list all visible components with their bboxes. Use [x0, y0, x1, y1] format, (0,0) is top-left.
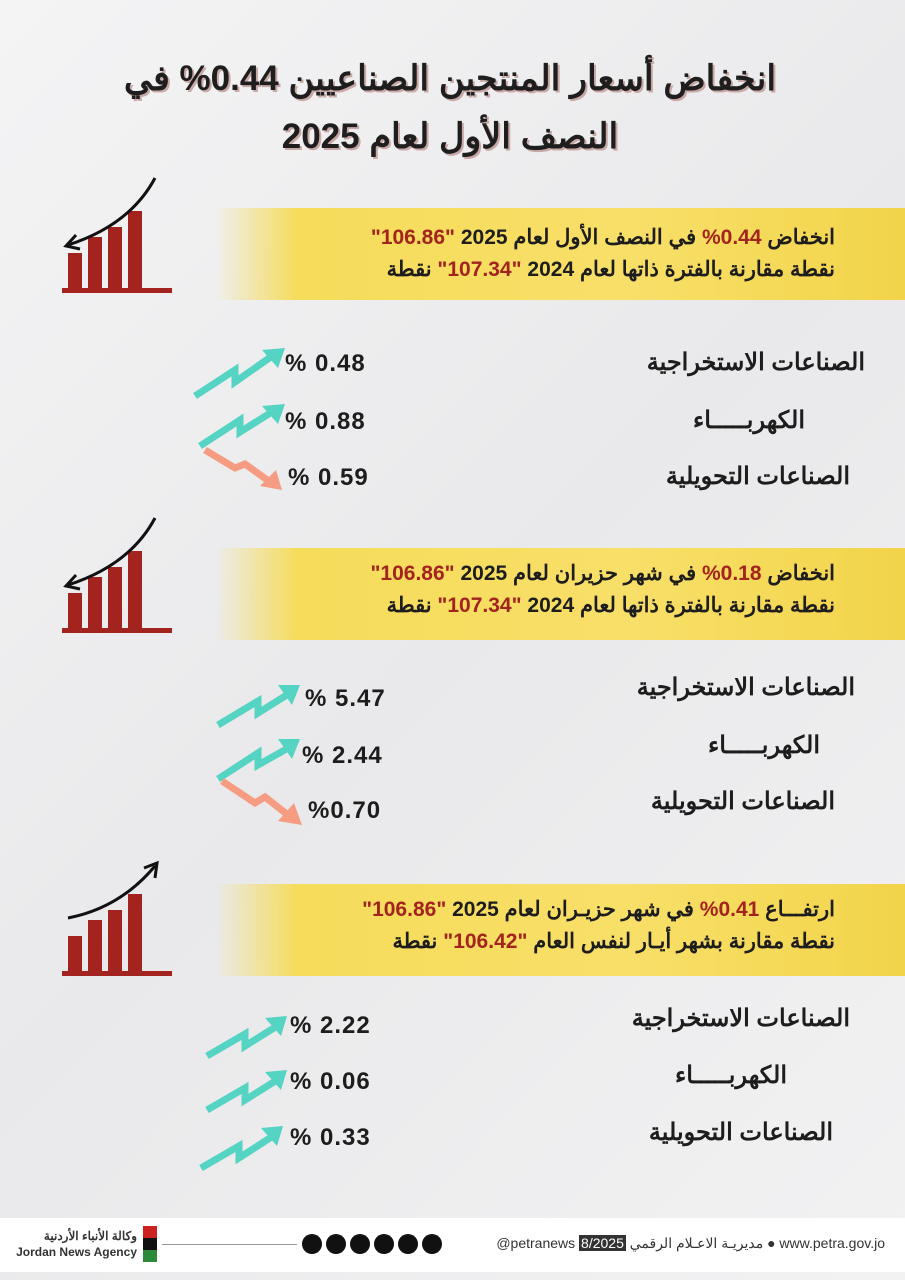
rows section 1: % 0.59 [288, 464, 369, 491]
rows section 1: الصناعات الاستخراجية [647, 349, 865, 376]
rows section 2 [216, 674, 855, 825]
icon: bar chart 2 [62, 517, 172, 633]
banner 1: نقطة مقارنة بالفترة ذاتها لعام 2024 "107.34" نقطة [387, 258, 835, 281]
rows section 1: الكهربـــــاء [693, 407, 805, 434]
rows section 1: % 0.48 [285, 350, 366, 377]
footer [0, 1218, 905, 1272]
rows section 2: الصناعات التحويلية [651, 788, 835, 815]
footer logo text: Jordan News Agency [16, 1245, 137, 1259]
banner 1: انخفاض 0.44% في النصف الأول لعام 2025 "106.86" [371, 226, 835, 249]
rows section 3: % 0.33 [290, 1124, 371, 1151]
rows section 3: الصناعات الاستخراجية [632, 1005, 850, 1032]
title: انخفاض أسعار المنتجين الصناعيين 0.44% في [124, 59, 776, 98]
banner 3: ارتفـــاع 0.41% في شهر حزيـران لعام 2025 "106.86" [362, 898, 835, 921]
rows section 1: % 0.88 [285, 408, 366, 435]
rows section 2: الكهربـــــاء [708, 732, 820, 759]
banner 2: انخفاض 0.18% في شهر حزيران لعام 2025 "106.86" [370, 562, 835, 585]
rows section 2: % 5.47 [305, 685, 386, 712]
title: النصف الأول لعام 2025 [282, 117, 618, 156]
banner 1 [215, 208, 905, 300]
rows section 3: % 2.22 [290, 1012, 371, 1039]
rows section 1: الصناعات التحويلية [666, 463, 850, 490]
rows section 1 [193, 348, 865, 491]
rows section 2: % 2.44 [302, 742, 383, 769]
rows section 2: %0.70 [308, 797, 381, 824]
icon: bar chart 3 [62, 860, 172, 976]
title [124, 54, 776, 160]
rows section 3 [199, 1005, 850, 1171]
rows section 3: الصناعات التحويلية [649, 1119, 833, 1146]
icon: bar chart 1 [62, 177, 172, 293]
rows section 3: الكهربـــــاء [675, 1062, 787, 1089]
rows section 2: الصناعات الاستخراجية [637, 674, 855, 701]
banner 3: نقطة مقارنة بشهر أيـار لنفس العام "106.42" نقطة [392, 930, 835, 953]
banner 2: نقطة مقارنة بالفترة ذاتها لعام 2024 "107.34" نقطة [387, 594, 835, 617]
footer logo text [16, 1228, 137, 1259]
footer logo text: وكالة الأنباء الأردنية [44, 1229, 137, 1243]
banner 2 [215, 548, 905, 640]
banner 3 [215, 884, 905, 976]
rows section 3: % 0.06 [290, 1068, 371, 1095]
footer contact text: @petranews 8/2025 مديريـة الاعـلام الرقمي ● www.petra.gov.jo [496, 1235, 885, 1251]
social icons [302, 1234, 442, 1254]
